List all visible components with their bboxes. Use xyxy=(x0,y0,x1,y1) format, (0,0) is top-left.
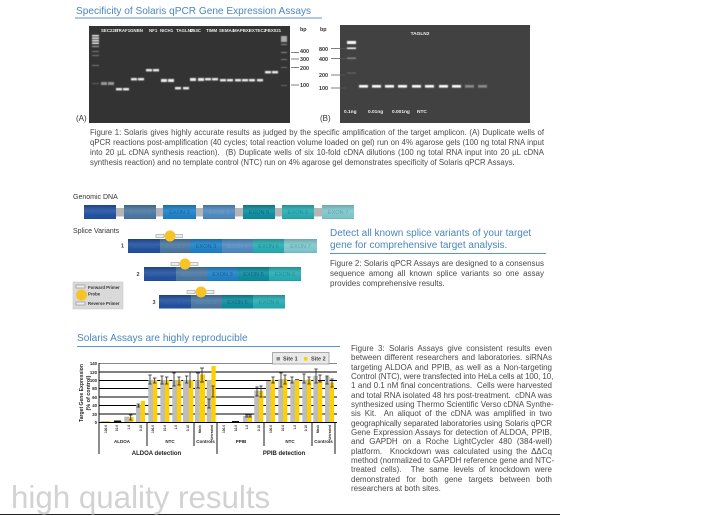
gel image B xyxy=(340,25,530,123)
site 2 bars xyxy=(106,366,334,422)
rule under heading 3 xyxy=(77,346,340,347)
y axis labels: 120 xyxy=(90,370,98,375)
figure 3 caption: synthesized using Thermo Scientific Verso cDNA Synthe- xyxy=(351,400,554,409)
heading: reproducible: Solaris Assays are highly reproducible xyxy=(77,333,248,344)
concentration labels: 100.0 xyxy=(222,425,226,433)
heading: specificity: Specificity of Solaris qPCR Gene Expression Assays xyxy=(76,6,311,17)
y axis title: (% of control) xyxy=(86,375,92,410)
splice variant 1: EXON 1 xyxy=(134,244,154,250)
concentration labels: 1.0 xyxy=(127,425,131,429)
chart legend: Site 2 xyxy=(311,356,326,362)
genomic DNA track: EXON 3 xyxy=(169,210,190,216)
y axis title: Target Gene Expression xyxy=(79,363,85,422)
group labels xyxy=(114,439,333,444)
gel B size scale: 800 xyxy=(319,47,328,53)
concentration labels: 10.0 xyxy=(234,425,238,431)
chart legend xyxy=(272,352,329,364)
gel A size scale: 100 xyxy=(300,83,309,89)
label B: (B) xyxy=(320,114,331,123)
figure 2 caption xyxy=(330,259,544,288)
splice variants label: Splice Variants xyxy=(73,228,120,235)
group labels: PPIB xyxy=(236,439,247,444)
concentration labels: 0.10 xyxy=(186,425,190,431)
splice variant 1: EXON 4 xyxy=(227,244,248,250)
splice variant 1: EXON 7 xyxy=(290,244,311,250)
gel image A: SEC22B xyxy=(101,28,118,33)
concentration labels: 1.0 xyxy=(174,425,178,429)
figure 3 caption: Figure 3: Solaris Assays give consistent results even xyxy=(351,344,552,353)
figure 3 caption: method (normalized to GAPDH reference gene and NTC- xyxy=(351,456,554,465)
splice variant 3: EXON 6 xyxy=(259,300,279,306)
genomic DNA track: EXON 7 xyxy=(328,210,348,216)
splice variant 1: EXON 2 xyxy=(165,244,185,250)
gel image A: MAPBXL xyxy=(233,28,252,33)
concentration labels: Mock xyxy=(198,425,202,433)
figure 3 caption: platform. Knockdown was calculated using the ΔΔCq xyxy=(351,447,552,456)
group labels: Controls xyxy=(196,439,215,444)
splice variant 3: EXON 5 xyxy=(227,300,248,306)
gel image B: TAGLN2 xyxy=(411,31,430,37)
concentration labels: Untreated xyxy=(210,425,214,440)
splice variant 2: EXON 6 xyxy=(275,272,295,278)
heading: splice variants callout: Detect all known splice variants of your target xyxy=(330,228,531,239)
figure 3 caption: and total RNA isolated 48 hrs post-treatment. cDNA was xyxy=(351,391,552,400)
gel B size scale: 200 xyxy=(319,73,328,79)
concentration labels: Mock xyxy=(316,425,320,433)
concentration labels: 100.0 xyxy=(151,425,155,433)
gel image B: 0.001ng xyxy=(392,109,410,115)
gel image A: NF1 xyxy=(149,28,158,33)
splice variant 1: 1 xyxy=(121,244,124,250)
gel B size scale: bp xyxy=(320,27,327,33)
figure 3 caption: Gene Expression Assays for detection of ALDOA, PPIB, xyxy=(351,428,552,437)
primer and probe legend: Forward Primer xyxy=(88,285,120,290)
bottom rule xyxy=(0,514,560,515)
figure 3 caption: between different researchers and laboratories. siRNAs xyxy=(351,353,552,362)
rule under heading 2 xyxy=(330,253,546,254)
figure 3 caption xyxy=(351,344,554,493)
group labels: NTC xyxy=(165,439,175,444)
gel image A: TRAF1 xyxy=(116,28,131,33)
concentration labels: 1.0 xyxy=(245,425,249,429)
gel image A: EXTEC2 xyxy=(249,28,267,33)
concentration labels: 10.0 xyxy=(115,425,119,431)
splice variant 2: EXON 3 xyxy=(212,272,233,278)
gel image B: 0.1ng xyxy=(344,109,357,115)
genomic DNA track: EXON 2 xyxy=(130,210,150,216)
gel image A: TIMM xyxy=(206,28,218,33)
figure 3 caption: sis Kit. An aliquot of the cDNA was amplified in two xyxy=(351,409,552,418)
y axis labels: 140 xyxy=(90,361,98,366)
splice variant 3 xyxy=(152,286,285,308)
label A: (A) xyxy=(76,114,87,123)
figure 2 caption: sequence among all known splice variants so one assay xyxy=(330,269,544,278)
gel image B: NTC xyxy=(417,109,427,115)
figure 3 caption: geographically separated laboratories using Solaris qPCR xyxy=(351,419,552,428)
genomic DNA label: Genomic DNA xyxy=(73,194,118,201)
splice variant 3: EXON 1 xyxy=(165,300,185,306)
gel image A: NICH1 xyxy=(160,28,174,33)
figure 3 caption: targeting ALDOA and PPIB, as well as a Non-targeting xyxy=(351,363,552,372)
group labels: Controls xyxy=(314,439,333,444)
genomic DNA track: EXON 6 xyxy=(288,210,308,216)
primer and probe legend: Reverse Primer xyxy=(88,301,120,306)
figure 1 caption: Figure 1: Solaris gives highly accurate results as judged by the specific amplification of the target amplicon. (A) Duplicate wells of xyxy=(90,128,544,137)
concentration labels: 100.0 xyxy=(269,425,273,433)
heading: splice variants callout xyxy=(330,228,532,251)
gel B size scale: 100 xyxy=(319,86,328,92)
genomic DNA track xyxy=(84,205,354,219)
genomic DNA track: EXON 5 xyxy=(249,210,269,216)
gel A size scale: bp xyxy=(300,27,307,33)
genomic DNA track: EXON 4 xyxy=(209,210,229,216)
figure 3 caption: 1 and 0.1 nM final concentrations. Cells were harvested xyxy=(351,381,552,390)
figure 3 caption: treated cells). The same levels of knockdown were xyxy=(351,465,552,474)
figure 3 caption: and GAPDH on a Roche LightCycler 480 (384-well) xyxy=(351,437,552,446)
splice variant 2: EXON 1 xyxy=(150,272,170,278)
gel image A: SEMA4 xyxy=(219,28,235,33)
gel image A xyxy=(89,26,290,123)
gel A size scale xyxy=(291,27,309,89)
figure 2 caption: provides comprehensive results. xyxy=(330,279,445,288)
gel A size scale: 400 xyxy=(300,49,309,55)
group labels: ALDOA xyxy=(114,439,131,444)
watermark: high quality results: high quality results xyxy=(11,480,270,515)
figure 1 caption: qPCR reactions post-amplification (40 cycles; total reaction volume loaded on gel) run on 4% agarose gels (100 ng total RNA input xyxy=(90,138,544,147)
figure 1 caption: synthesis reaction) and no template control (NTC) run on 4% agarose gel demonstrates specificity of Solaris qPCR Assays. xyxy=(90,158,515,167)
concentration labels: 0.10 xyxy=(257,425,261,431)
splice variant 2: EXON 5 xyxy=(243,272,264,278)
gel image A: P53C xyxy=(190,28,202,33)
bar chart: knockdown reproducibility xyxy=(79,352,337,457)
figure 2 caption: Figure 2: Solaris qPCR Assays are designed to a consensus xyxy=(330,259,544,268)
y axis labels: 0 xyxy=(95,420,98,425)
gel image A: GNBN xyxy=(130,28,143,33)
y axis title xyxy=(79,363,92,422)
rule under heading 1 xyxy=(75,18,322,19)
splice variant 2 xyxy=(136,258,301,281)
y axis labels: 40 xyxy=(92,403,98,408)
gel B size scale: 400 xyxy=(319,57,328,63)
gel B size scale xyxy=(319,27,346,92)
y axis labels xyxy=(90,361,98,425)
figure 1 caption: into 20 µL cDNA synthesis reaction). (B) Duplicate wells of six 10-fold cDNA dilutions (100 ng total RNA input into 20 µL cDNA xyxy=(90,148,544,157)
splice variant 3: EXON 2 xyxy=(196,300,217,306)
y axis labels: 80 xyxy=(92,386,98,391)
chart legend: Site 1 xyxy=(283,356,298,362)
group labels: NTC xyxy=(285,439,295,444)
concentration labels: 1.0 xyxy=(293,425,297,429)
concentration labels: 10.0 xyxy=(281,425,285,431)
splice variant 2: 2 xyxy=(136,272,140,278)
figure 1 caption xyxy=(90,128,544,167)
gel image B: 0.01ng xyxy=(368,109,383,115)
concentration labels: Untreated xyxy=(328,425,332,440)
site 1 bars xyxy=(101,376,330,422)
concentration labels: 100.0 xyxy=(104,425,108,433)
figure 3 caption: researchers at both sites. xyxy=(351,484,441,493)
genomic DNA track: EXON 1 xyxy=(90,210,110,216)
primer and probe legend: Probe xyxy=(88,292,101,296)
gel image A: TAGLN2 xyxy=(176,28,194,33)
detection labels: ALDOA detection xyxy=(132,451,182,457)
concentration labels: 0.10 xyxy=(139,425,143,431)
figure 3 caption: demonstrated for both gene targets between both xyxy=(351,475,552,484)
heading: splice variants callout: gene for comprehensive target analysis. xyxy=(330,240,507,251)
y axis labels: 100 xyxy=(90,378,98,383)
y axis labels: 20 xyxy=(92,412,98,417)
figure 3 caption: Control (NTC), were transfected into HeLa cells at 100, 10, xyxy=(351,372,553,381)
gel A size scale: 300 xyxy=(300,57,309,63)
detection labels: PPIB detection xyxy=(263,451,306,457)
gel A size scale: 200 xyxy=(300,66,309,72)
concentration labels: 10.0 xyxy=(163,425,167,431)
gel image A: FBX021 xyxy=(265,28,282,33)
splice variant 1 xyxy=(121,230,317,253)
splice variant 1: EXON 6 xyxy=(258,244,279,250)
splice variant 3: 3 xyxy=(152,300,156,306)
concentration labels xyxy=(104,425,332,440)
splice variant 1: EXON 3 xyxy=(196,244,216,250)
error bars xyxy=(129,368,215,420)
primer and probe legend xyxy=(73,282,123,309)
splice variant 2: EXON 2 xyxy=(181,272,202,278)
concentration labels: 0.10 xyxy=(304,425,308,431)
detection labels xyxy=(132,451,306,457)
y axis labels: 60 xyxy=(92,395,98,400)
